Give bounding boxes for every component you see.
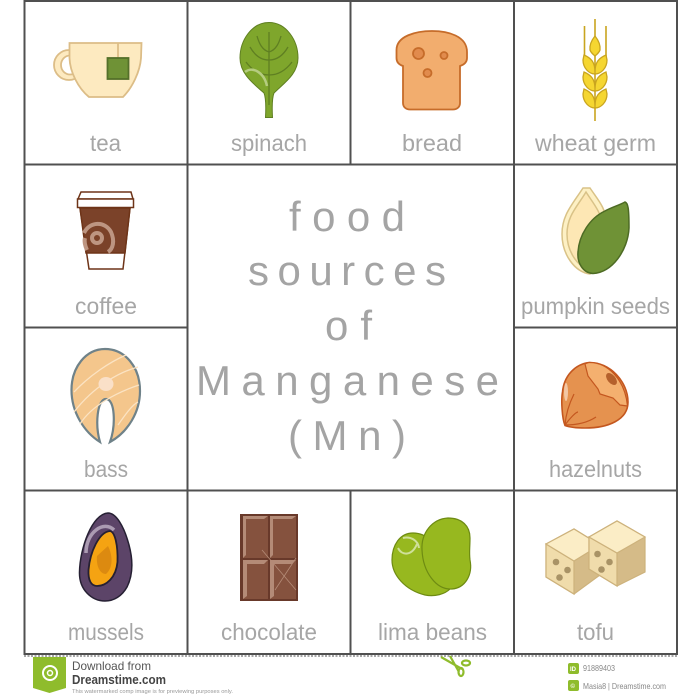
icon: mussel shell	[79, 513, 132, 601]
food label: pumpkin seeds: pumpkin seeds	[521, 293, 670, 319]
icon: spinach leaf	[240, 22, 298, 118]
food label: tea	[54, 43, 142, 156]
icon: takeaway coffee cup	[78, 192, 134, 269]
image id credit: 91889403	[583, 663, 615, 673]
food label: tea: tea	[90, 130, 121, 156]
food label: bread: bread	[402, 130, 462, 156]
food label: wheat germ: wheat germ	[534, 130, 656, 156]
title	[196, 193, 499, 459]
food label: bass	[72, 349, 140, 482]
food label: hazelnuts: hazelnuts	[549, 456, 642, 482]
image id credit	[568, 663, 615, 674]
food label: mussels: mussels	[68, 619, 144, 645]
download credit text: This watermarked comp image is for previewing purposes only.	[72, 689, 233, 695]
author credit: ©	[570, 683, 576, 690]
download credit text: Dreamstime.com	[72, 672, 166, 687]
title: (Mn)	[288, 412, 406, 459]
icon: wheat ear	[583, 19, 607, 121]
icon: hazelnut	[562, 362, 628, 428]
food label: coffee	[75, 192, 137, 319]
download credit text	[72, 659, 233, 695]
author credit	[568, 680, 666, 691]
food label: spinach: spinach	[231, 130, 307, 156]
icon: chocolate bar	[240, 514, 298, 601]
icon: tea cup	[54, 43, 142, 97]
food label: bass: bass	[84, 456, 128, 482]
title: Manganese	[196, 357, 499, 404]
food label: chocolate: chocolate	[221, 619, 317, 645]
title: sources	[248, 247, 446, 294]
food label: coffee: coffee	[75, 293, 137, 319]
food label: mussels	[68, 513, 144, 645]
icon: bread slice	[396, 31, 467, 110]
download credit text: Download from	[72, 659, 151, 673]
food label: lima beans	[378, 518, 487, 645]
dreamstime ribbon logo	[33, 657, 66, 693]
image id credit: ID	[570, 667, 577, 673]
food label: tofu: tofu	[577, 619, 614, 645]
food label: pumpkin seeds	[521, 188, 670, 319]
food label: hazelnuts	[549, 362, 642, 482]
title: food	[289, 193, 405, 240]
food label: lima beans: lima beans	[378, 619, 487, 645]
author credit: Masia8 | Dreamstime.com	[583, 681, 666, 691]
food label: wheat germ	[534, 19, 656, 156]
food label: bread	[396, 31, 467, 156]
icon: pumpkin seed	[562, 188, 629, 274]
food label: chocolate	[221, 514, 317, 645]
food label: spinach	[231, 22, 307, 156]
food label: tofu	[546, 521, 645, 645]
title: of	[325, 302, 372, 349]
icon: scissors	[441, 656, 470, 676]
icon: fish steak	[72, 349, 140, 442]
icon: lima beans	[392, 518, 471, 596]
icon: tofu cubes	[546, 521, 645, 594]
